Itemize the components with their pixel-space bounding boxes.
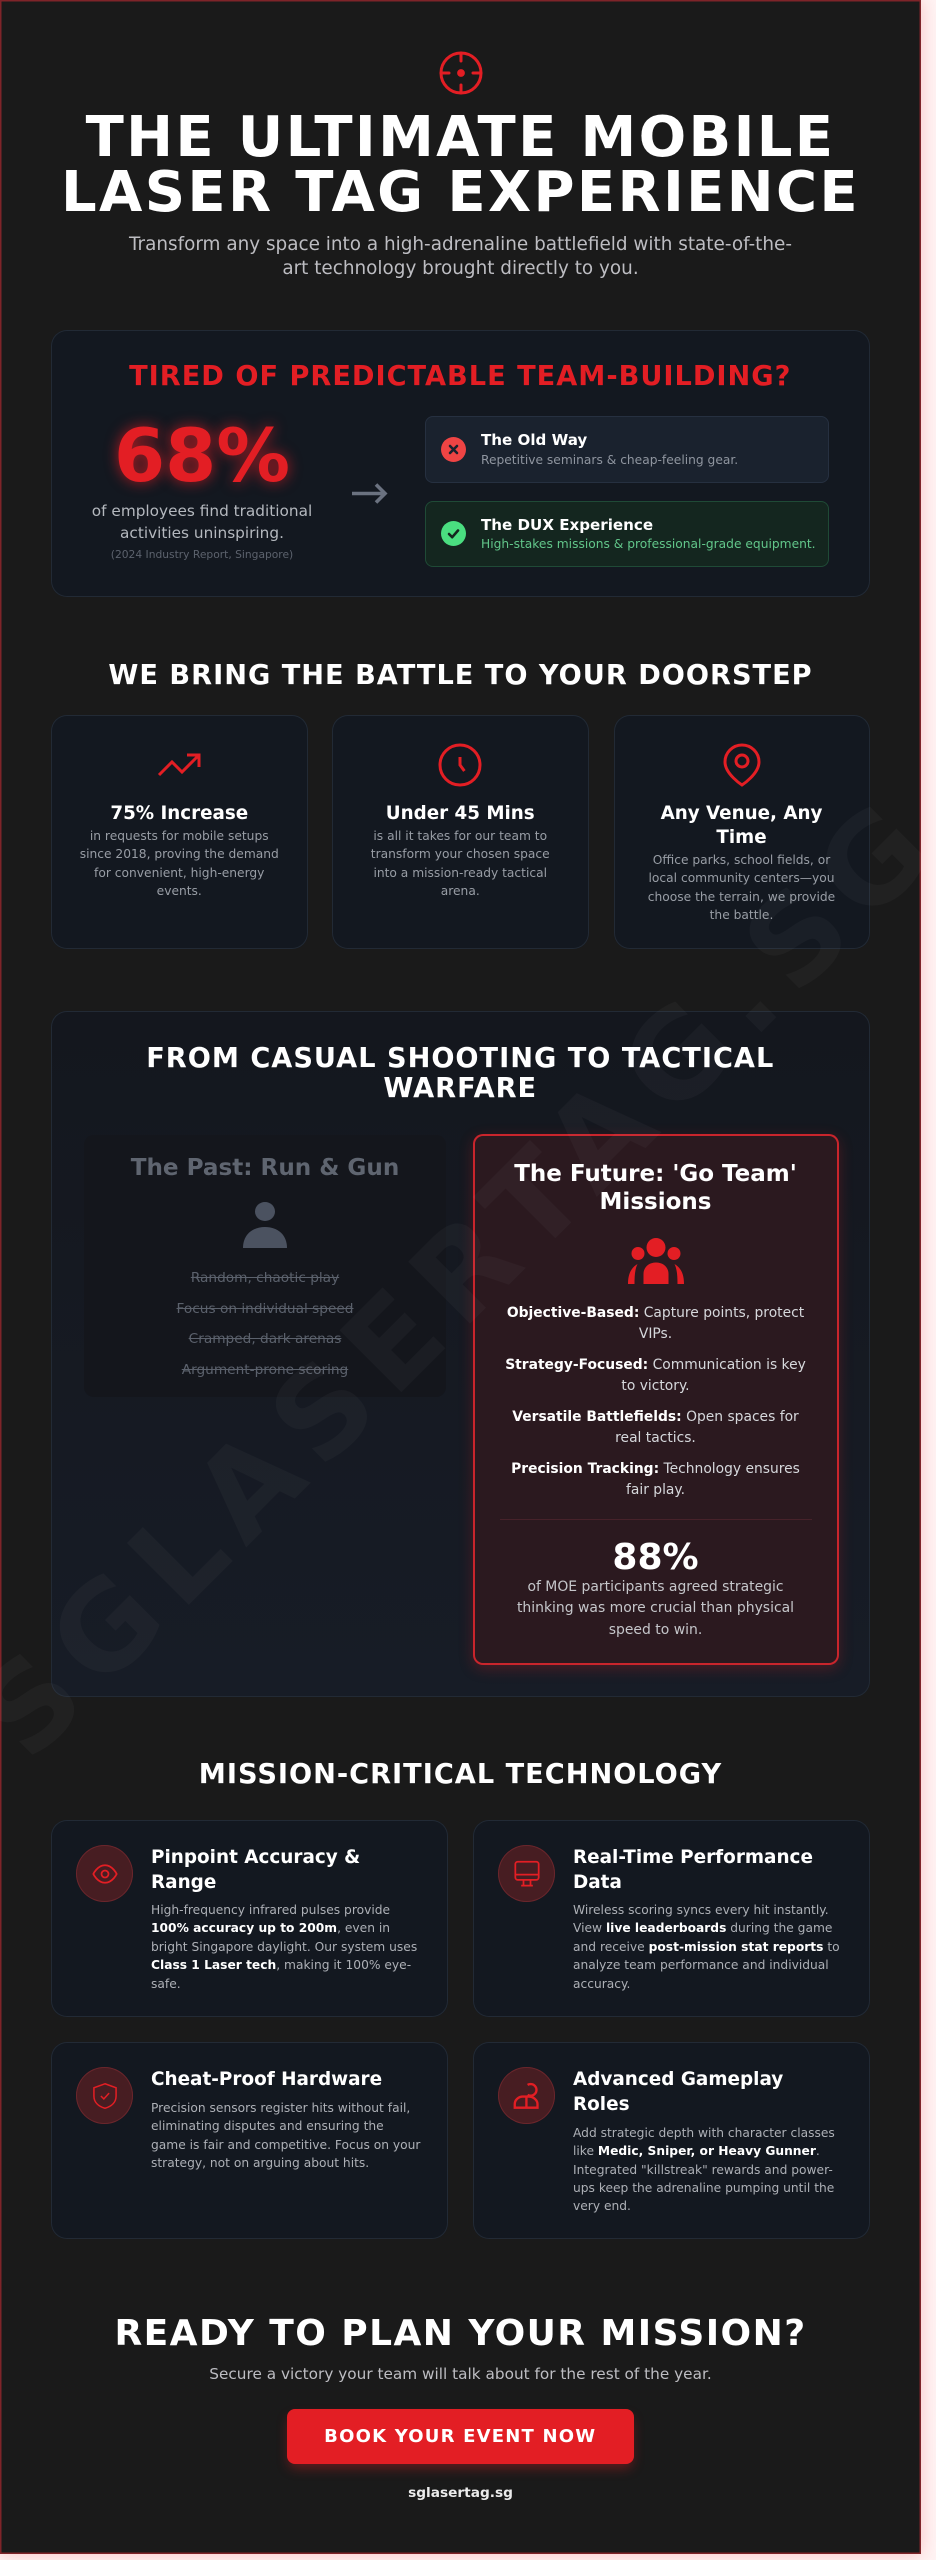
card title: Cheat-Proof Hardware: [151, 2069, 382, 2090]
title: [61, 105, 860, 225]
card text: Wireless scoring syncs every hit instantly.: [573, 1903, 829, 1917]
card: cheat-proof hardware: [51, 2042, 448, 2239]
old way title: The Old Way: [481, 431, 587, 449]
heading: from casual shooting: WARFARE: [383, 1072, 537, 1104]
icon: monitor: [498, 1845, 555, 1902]
future title: Missions: [600, 1189, 711, 1215]
future point: strategy-focused: to victory.: [621, 1378, 690, 1394]
icon: map pin: [724, 744, 760, 787]
card text: [573, 1903, 840, 1991]
subtitle: art technology brought directly to you.: [282, 258, 639, 279]
card text: strategy, not on arguing about hits.: [151, 2156, 369, 2170]
icon: clock: [438, 744, 482, 786]
panel: the future: [472, 1134, 838, 1665]
card text: [648, 853, 835, 922]
future point: versatile battlefields: [512, 1408, 799, 1446]
card text: [151, 2101, 420, 2170]
card: under 45 mins: [332, 715, 588, 949]
card text: High-frequency infrared pulses provide: [151, 1903, 390, 1917]
icon: crosshair target: [440, 52, 482, 94]
card text: the battle.: [710, 908, 773, 922]
comparison: the DUX experience: [425, 501, 829, 567]
heading: tired of predictable team-building: TIRED OF PREDICTABLE TEAM-BUILDING?: [129, 361, 791, 392]
card: advanced gameplay roles: [473, 2042, 870, 2239]
comparison: the old way: [425, 416, 829, 483]
card text: accuracy.: [573, 1977, 630, 1991]
card text: Class 1 Laser tech, making it 100% eye-: [151, 1958, 411, 1972]
stat: 68 percent: 68%: [114, 414, 290, 499]
icon: role user: [498, 2067, 555, 2124]
card text: Precision sensors register hits without fail,: [151, 2101, 410, 2115]
card text: local community centers—you: [649, 871, 834, 885]
card text: like Medic, Sniper, or Heavy Gunner.: [573, 2144, 820, 2158]
future title: [514, 1161, 797, 1215]
DUX text: High-stakes missions & professional-grade equipment.: [481, 537, 816, 551]
stat: 88 percent: 88%: [612, 1537, 699, 1578]
panel: casual to tactical: [51, 1011, 870, 1697]
card: real-time data: [473, 1820, 870, 2017]
call to action text: Secure a victory your team will talk about for the rest of the year.: [209, 2365, 712, 2383]
list item: Cramped, dark arenas: [189, 1331, 341, 1347]
future point: versatile battlefields: real tactics.: [615, 1430, 696, 1446]
future point: versatile battlefields: Versatile Battlefields: Open spaces for: [512, 1408, 799, 1424]
card text: Add strategic depth with character classes: [573, 2126, 835, 2140]
list item: Argument-prone scoring: [182, 1362, 348, 1378]
card text: is all it takes for our team to: [373, 829, 547, 843]
call to action heading: READY TO PLAN YOUR MISSION?: [114, 2312, 807, 2354]
stat description: speed to win.: [609, 1622, 702, 1638]
icon: trending up: [158, 754, 200, 776]
past title: The Past: Run & Gun: [131, 1155, 399, 1181]
card text: View live leaderboards during the game: [573, 1921, 832, 1935]
past list: [176, 1270, 354, 1378]
card title: [660, 803, 822, 848]
card: 75% increase: [51, 715, 308, 949]
stat description: of employees find traditional: [92, 502, 312, 520]
card text: eliminating disputes and ensuring the: [151, 2119, 384, 2133]
card text: [151, 1903, 417, 1991]
card text: events.: [157, 884, 202, 898]
card title: Any Venue, Any: [661, 803, 822, 824]
card text: since 2018, proving the demand: [80, 847, 279, 861]
card title: [573, 1847, 813, 1892]
future point: precision tracking: fair play.: [626, 1482, 685, 1498]
divider line: [500, 1519, 812, 1520]
panel: the past: [84, 1135, 446, 1397]
title: LASER TAG EXPERIENCE: [61, 160, 860, 225]
card text: Office parks, school fields, or: [653, 853, 830, 867]
stat description: activities uninspiring.: [120, 524, 284, 542]
icon: check mark: [441, 521, 466, 546]
button: book your event: BOOK YOUR EVENT NOW: [324, 2426, 596, 2447]
card title: Pinpoint Accuracy &: [151, 1847, 360, 1868]
heading: we bring the battle: WE BRING THE BATTLE TO YOUR DOORSTEP: [108, 660, 813, 690]
card title: Data: [573, 1872, 622, 1892]
future point: precision tracking: Precision Tracking: Technology ensures: [511, 1460, 800, 1476]
card text: analyze team performance and individual: [573, 1958, 829, 1972]
card title: [573, 2069, 783, 2114]
list item: Focus on individual speed: [177, 1301, 353, 1317]
future point: objective-based: Objective-Based: Capture points, protect: [507, 1304, 804, 1320]
card text: game is fair and competitive. Focus on your: [151, 2138, 420, 2152]
future point: strategy-focused: Strategy-Focused: Communication is key: [505, 1356, 806, 1372]
card text: [573, 2126, 835, 2213]
icon: x mark: [441, 437, 466, 462]
card: pinpoint accuracy: [51, 1820, 448, 2017]
card text: [80, 829, 279, 898]
heading: from casual shooting: FROM CASUAL SHOOTING TO TACTICAL: [146, 1042, 774, 1074]
stat description: [92, 502, 312, 542]
panel: problem statement: [51, 330, 870, 597]
card title: Range: [151, 1872, 216, 1892]
arrow: [352, 483, 388, 504]
button: book your event: [287, 2409, 634, 2464]
card text: arena.: [441, 884, 480, 898]
stat description: thinking was more crucial than physical: [517, 1600, 794, 1616]
card title: Under 45 Mins: [386, 803, 535, 824]
card text: 100% accuracy up to 200m, even in: [151, 1921, 390, 1935]
card title: Time: [716, 827, 767, 848]
card title: Roles: [573, 2094, 630, 2114]
future point: objective-based: VIPs.: [639, 1326, 672, 1342]
list item: Random, chaotic play: [191, 1270, 339, 1286]
card text: choose the terrain, we provide: [648, 890, 835, 904]
DUX title: The DUX Experience: [481, 516, 653, 534]
title: THE ULTIMATE MOBILE: [86, 105, 835, 170]
card text: safe.: [151, 1977, 181, 1991]
card text: in requests for mobile setups: [90, 829, 269, 843]
old way text: Repetitive seminars & cheap-feeling gear.: [481, 453, 738, 467]
subtitle: [128, 234, 792, 279]
card title: [151, 1847, 360, 1892]
future point: objective-based: [507, 1304, 804, 1342]
footer website: sglasertag.sg: [408, 2485, 513, 2501]
stat description: of MOE participants agreed strategic: [527, 1578, 784, 1594]
future point: strategy-focused: [505, 1356, 806, 1394]
card title: Real-Time Performance: [573, 1847, 813, 1868]
card text: for convenient, high-energy: [94, 866, 264, 880]
card title: 75% Increase: [110, 803, 248, 824]
future point: precision tracking: [511, 1460, 800, 1498]
card text: bright Singapore daylight. Our system uses: [151, 1940, 417, 1954]
card text: very end.: [573, 2199, 631, 2213]
icon: shield check: [76, 2067, 133, 2124]
card: any venue: [614, 715, 870, 949]
card text: into a mission-ready tactical: [373, 866, 547, 880]
card text: Integrated "killstreak" rewards and power-: [573, 2163, 833, 2177]
card text: ups keep the adrenaline pumping until the: [573, 2181, 834, 2195]
subtitle: Transform any space into a high-adrenaline battlefield with state-of-the-: [129, 234, 792, 254]
icon: team: [628, 1238, 684, 1284]
heading: mission-critical technology: MISSION-CRITICAL TECHNOLOGY: [199, 1758, 722, 1790]
future title: The Future: 'Go Team': [514, 1161, 797, 1187]
stat description: [517, 1578, 794, 1638]
card text: transform your chosen space: [371, 847, 550, 861]
icon: eye: [76, 1845, 133, 1902]
card text: and receive post-mission stat reports to: [573, 1940, 840, 1954]
heading: from casual shooting: [146, 1042, 774, 1104]
stat source: (2024 Industry Report, Singapore): [111, 548, 293, 561]
card text: [371, 829, 550, 898]
icon: single person: [243, 1202, 287, 1248]
card title: Advanced Gameplay: [573, 2069, 783, 2090]
